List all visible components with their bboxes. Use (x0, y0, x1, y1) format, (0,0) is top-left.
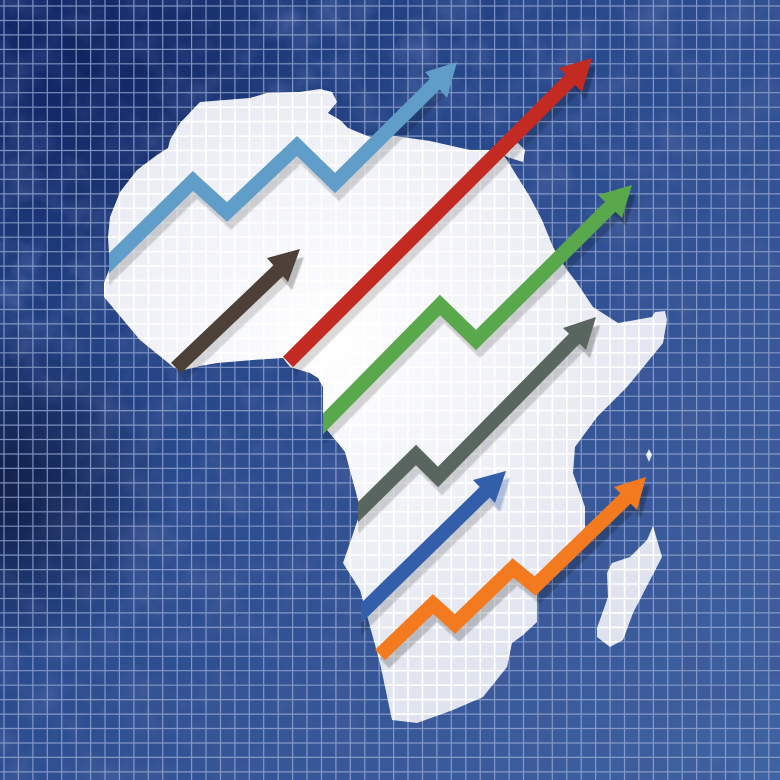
arrow: royal blue (352, 471, 510, 630)
arrow: slate grey zigzag (350, 317, 600, 528)
arrow: red (288, 58, 596, 370)
arrow: green zigzag (316, 185, 636, 439)
arrow: light blue zigzag (100, 62, 457, 280)
arrow: orange zigzag (380, 477, 650, 663)
map of Africa with Madagascar (104, 89, 667, 723)
arrow: dark brown (176, 249, 304, 376)
